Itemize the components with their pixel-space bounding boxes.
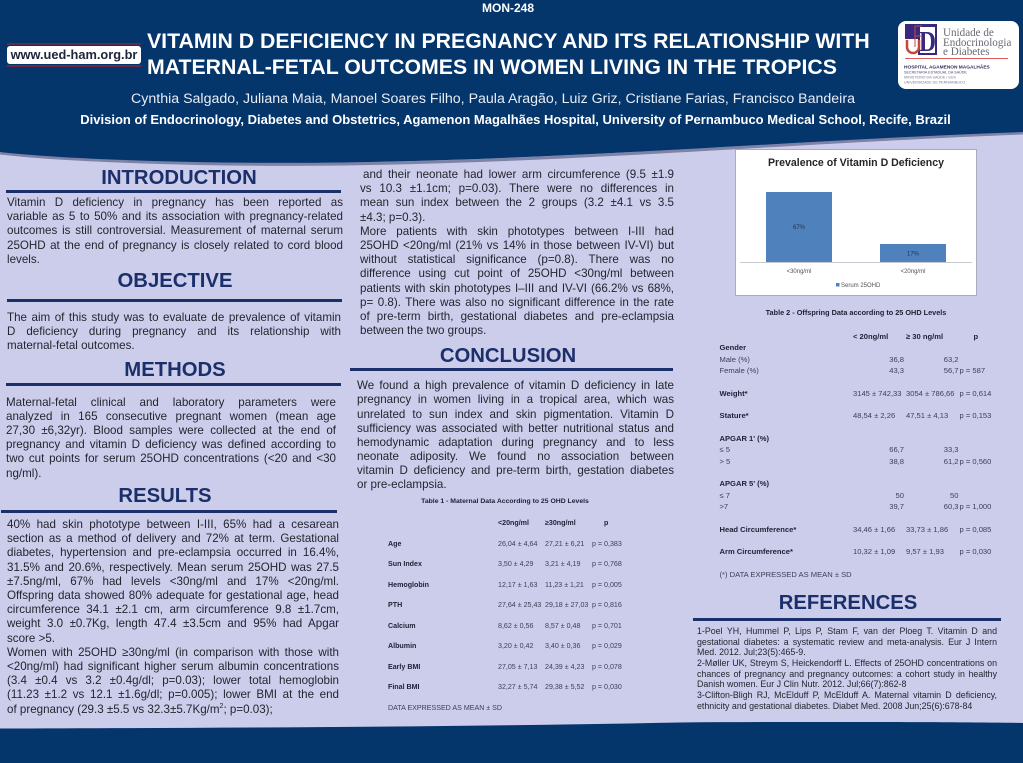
table 1 data: 8,57 ± 0,48: [545, 622, 580, 630]
table 2 data: Stature*: [720, 411, 749, 420]
text: references: 2-Møller UK, Streym S, Heickendorff L. Effects of 25OHD concentrations on: [697, 658, 997, 668]
table 1 data: 27,64 ± 25,43: [498, 601, 541, 609]
table 1 data: PTH: [388, 601, 402, 609]
bar chart: prevalence of vitamin D deficiency: [735, 149, 977, 296]
panel: results: [1, 485, 339, 716]
table 1 data: 32,27 ± 5,74: [498, 683, 537, 691]
table 2: offspring data: [720, 308, 992, 579]
text: introduction: variable as 5 to 50% and its association with pregnancy-related: [7, 210, 343, 223]
text: references: ethnicity and gestational diabetes. Diabet Med. 2008 Jun;25(6):678-84: [697, 701, 972, 711]
table 1 data: Hemoglobin: [388, 581, 429, 589]
table 2 data: > 5: [720, 457, 730, 466]
text: conclusion: neonate adiposity. We found no association between: [357, 450, 674, 463]
table 2 data: p: [974, 332, 978, 341]
text: introduction: Vitamin D deficiency in pregnancy has been reported as: [7, 196, 343, 209]
text: objective: maternal-fetal outcomes.: [7, 339, 135, 352]
table 2 data: >7: [720, 502, 728, 511]
text: results: Offspring data showed 80% adequate for gestational age, head: [7, 589, 339, 602]
header band: [0, 0, 1023, 166]
text: references: Danish women. Eur J Clin Nutr. 2012. Jul;66(7):862-8: [697, 679, 906, 689]
table 1 data: 3,40 ± 0,36: [545, 642, 580, 650]
table 2 data: [720, 332, 992, 579]
panel: introduction: [6, 167, 343, 266]
text: results: (11.23 ±1.2 vs 12.1 ±1.6g/dl; p=0.005); lower BMI at the end: [7, 688, 339, 701]
title: MATERNAL-FETAL OUTCOMES IN WOMEN LIVING IN THE TROPICS: [147, 55, 837, 79]
text: references: chances of pregnancy and pregnancy outcomes: a cohort study in healthy: [697, 669, 997, 679]
table 2 data: 33,3: [944, 445, 958, 454]
table 1 data: p: [604, 519, 608, 527]
text: results: score >5.: [7, 632, 55, 645]
table 2 data: 36,8: [889, 355, 904, 364]
table 2 data: ≤ 5: [720, 445, 730, 454]
table 1 data: [388, 519, 622, 712]
panel: references: [693, 592, 1001, 711]
text: results: Women with 25OHD ≥30ng/ml (in comparison with those with: [7, 646, 339, 659]
table 1 data: p = 0,701: [592, 622, 622, 630]
bar: under 20 ng/ml: 17%: [907, 252, 920, 258]
text: introduction: levels.: [7, 253, 40, 266]
text: results: <20ng/ml) had significant higher serum albumin concentrations: [7, 660, 339, 673]
poster number: MON-248: [482, 1, 534, 15]
authors: Cynthia Salgado, Juliana Maia, Manoel Soares Filho, Paula Aragão, Luiz Griz, Cristiane Farias, Francisco Bandeira: [131, 91, 855, 107]
table 1 data: 29,38 ± 5,52: [545, 683, 584, 691]
table 1 data: DATA EXPRESSED AS MEAN ± SD: [388, 704, 502, 712]
text: results continued: ±4.3; p=0.3).: [360, 211, 425, 224]
table 2 data: 50: [896, 491, 904, 500]
text: methods: ng/ml).: [6, 467, 41, 480]
text: methods: 27,30 ±6,32yr). Blood samples were collected at the end of: [6, 424, 336, 437]
footer band: [0, 722, 1023, 763]
table 2 data: p = 587: [960, 366, 985, 375]
heading: methods: METHODS: [124, 359, 226, 381]
text: results: circumference 34.1 ±2.1 cm, arm circumference 9.8 ±1.7cm,: [7, 603, 339, 616]
text: introduction: 25OHD at the end of pregnancy is closely related to cord blood: [7, 239, 343, 252]
table 1 data: 27,21 ± 6,21: [545, 540, 584, 548]
logo: HOSPITAL AGAMENON MAGALHÃES: [904, 64, 991, 70]
text: results continued: More patients with skin phototypes between I-III had: [360, 225, 674, 238]
logo: e Diabetes: [943, 46, 990, 58]
table 1 data: Calcium: [388, 622, 416, 630]
table 2 data: p = 0,614: [960, 389, 991, 398]
logo: UNIVERSIDADE DE PERNAMBUCO: [904, 80, 965, 84]
table 2 data: 63,2: [944, 355, 958, 364]
chart title: Prevalence of Vitamin D Deficiency: [768, 157, 944, 169]
bar: under 30 ng/ml: 67%: [793, 225, 806, 231]
table 2 data: Female (%): [720, 366, 759, 375]
table 2 data: Arm Circumference*: [720, 547, 793, 556]
table 2 data: (*) DATA EXPRESSED AS MEAN ± SD: [720, 570, 852, 579]
text: objective: [7, 311, 341, 352]
table 1 data: 27,05 ± 7,13: [498, 663, 537, 671]
text: conclusion: unrelated to sun index and skin pigmentation. Vitamin D: [357, 408, 674, 421]
table 1 data: p = 0,768: [592, 560, 622, 568]
text: objective: D deficiency during pregnancy and its relationship with: [7, 325, 341, 338]
text: methods: Maternal-fetal clinical and laboratory parameters were: [6, 396, 336, 409]
logo: SECRETARIA ESTADUAL DA SAÚDE: [904, 70, 967, 74]
text: results: weight 3.0 ±0.7Kg, length 47.4 ±3.5cm and 95% had Apgar: [7, 617, 339, 630]
table 1 data: 29,18 ± 27,03: [545, 601, 588, 609]
text: results: ±7.5ng/ml, 67% had levels <30ng/ml and 17% <20ng/ml.: [7, 575, 339, 588]
table 2 data: 50: [950, 491, 958, 500]
table 1 data: Final BMI: [388, 683, 420, 691]
heading: results: RESULTS: [118, 485, 212, 507]
table 2 data: 61,2: [944, 457, 958, 466]
text: methods: two cut points for serum 25OHD concentrations (<20 and <30: [6, 452, 336, 465]
table 2 data: Head Circumference*: [720, 525, 796, 534]
logo: MINISTÉRIO DA SAÚDE / SUS: [904, 74, 956, 80]
table 2 data: 38,8: [889, 457, 904, 466]
table 2 data: APGAR 5' (%): [720, 479, 769, 488]
text: objective: The aim of this study was to evaluate de prevalence of vitamin: [7, 311, 341, 324]
table 1 data: Sun Index: [388, 560, 422, 568]
text: conclusion: sufficiency was associated with better nutritional status and: [357, 422, 674, 435]
logo: Endocrinologia: [943, 37, 1011, 49]
table 1: maternal data: [388, 498, 622, 712]
table 2 data: 3145 ± 742,33: [853, 389, 902, 398]
table 2 data: ≤ 7: [720, 491, 730, 500]
table 2 data: p = 0,153: [960, 411, 991, 420]
table 1 data: 3,21 ± 4,19: [545, 560, 580, 568]
table 1 data: 11,23 ± 1,21: [545, 581, 584, 589]
table 2 data: 3054 ± 786,66: [906, 389, 955, 398]
heading: objective: OBJECTIVE: [118, 270, 232, 292]
table 2 data: 33,73 ± 1,86: [906, 525, 948, 534]
table 1 data: Albumin: [388, 642, 416, 650]
text: results continued: [360, 168, 674, 337]
text: results: 31.5% and 20.6%, respectively. Mean serum 25OHD was 27.5: [7, 560, 339, 574]
table 1 data: 24,39 ± 4,23: [545, 663, 584, 671]
axis labels: <30ng/ml: [787, 269, 811, 275]
table 2 data: 10,32 ± 1,09: [853, 547, 895, 556]
table 2 data: p = 0,560: [960, 457, 991, 466]
text: conclusion: or pre-eclampsia.: [357, 478, 447, 491]
panel: objective: [7, 270, 342, 352]
text: methods: pregnancy and vitamin D deficiency was defined according to: [6, 438, 336, 451]
title: [147, 29, 870, 79]
table 2 data: 56,7: [944, 366, 958, 375]
text: introduction: [7, 196, 343, 266]
text: results: of pregnancy (29.3 ±5.5 vs 32.3±5.7Kg/m2; p=0.03);: [7, 703, 273, 716]
bar: under 30 ng/ml: [766, 192, 832, 262]
axis labels: <20ng/ml: [901, 269, 925, 275]
table 2 data: ≥ 30 ng/ml: [906, 332, 943, 341]
table 1 data: p = 0,078: [592, 663, 622, 671]
table 2 data: 34,46 ± 1,66: [853, 525, 895, 534]
table 2 data: p = 0,085: [960, 525, 991, 534]
table 1 data: p = 0,029: [592, 642, 622, 650]
text: results: section as a method of delivery and 72% at term. Gestational: [7, 532, 339, 545]
text: references: Med. 2012. Jul;23(5):465-9.: [697, 647, 806, 657]
table 1 data: 3,20 ± 0,42: [498, 642, 533, 650]
text: results continued: 25OHD <20ng/ml (21% vs 14% in those between IV-VI) but: [360, 239, 674, 252]
text: references: 1-Poel YH, Hummel P, Lips P, Stam F, van der Ploeg T. Vitamin D and: [697, 626, 997, 636]
heading: introduction: INTRODUCTION: [101, 167, 257, 189]
axis labels: [787, 269, 925, 275]
table 2 data: Weight*: [720, 389, 748, 398]
table 1 data: p = 0,816: [592, 601, 622, 609]
website badge: www.ued-ham.org.br: [11, 47, 137, 62]
text: results continued: mean sun index between the 2 groups (3.2 ±4.1 vs 3.5: [360, 196, 674, 209]
text: results continued: of pre-term birth, gestational diabetes and pre-eclampsia: [360, 310, 674, 323]
table 1 data: 26,04 ± 4,64: [498, 540, 537, 548]
text: results continued: p= 0.8). There was also no significant difference in the rate: [360, 296, 674, 309]
logo: Unidade de: [943, 27, 994, 39]
text: methods: analyzed in 165 consecutive pregnant women (mean age: [6, 410, 336, 423]
table 2 data: p = 1,000: [960, 502, 991, 511]
table 1 data: Early BMI: [388, 663, 420, 671]
table 1 data: p = 0,383: [592, 540, 622, 548]
table 1 data: 3,50 ± 4,29: [498, 560, 533, 568]
table 1 data: 12,17 ± 1,63: [498, 581, 537, 589]
panel: conclusion: [350, 345, 674, 491]
logo: [898, 21, 1019, 89]
text: results: [7, 518, 339, 716]
affiliation: Division of Endocrinology, Diabetes and Obstetrics, Agamenon Magalhães Hospital, University of Pernambuco Medical School, Recife, Brazil: [80, 112, 951, 127]
text: references: [697, 626, 997, 711]
text: results: 40% had skin phototype between I-III, 65% had a cesarean: [7, 518, 339, 531]
table 2 data: 43,3: [889, 366, 904, 375]
logo: D: [919, 27, 936, 58]
table 1 data: Age: [388, 540, 401, 548]
text: introduction: outcomes is still controversial. Measurement of maternal serum: [7, 224, 343, 237]
bar: under 20 ng/ml: [880, 244, 946, 262]
heading: references: REFERENCES: [779, 592, 917, 614]
table 2 data: 39,7: [889, 502, 904, 511]
text: conclusion: pregnancy in women living in a tropical area, which was: [357, 393, 674, 406]
text: results: (3.4 ±0.4 vs 3.2 ±0.4g/dl; p=0.03); lower total hemoglobin: [7, 674, 339, 687]
table 1 data: <20ng/ml: [498, 519, 529, 527]
text: results continued: vs 10.3 ±1.1cm; p=0.03). There were no differences in: [360, 182, 674, 195]
text: results: diabetes, hypertension and pre-eclampsia occurred in 16.4%,: [7, 546, 339, 559]
table 2 data: 66,7: [889, 445, 904, 454]
table 1 title: Table 1 - Maternal Data According to 25 OHD Levels: [421, 498, 589, 505]
table 2 data: Male (%): [720, 355, 750, 364]
table 2 data: 47,51 ± 4,13: [906, 411, 948, 420]
table 2 data: Gender: [720, 343, 746, 352]
text: results continued: without statistical significance (p=0.8). There was no: [360, 253, 674, 266]
text: conclusion: [357, 379, 674, 491]
legend: Serum 25OHD: [841, 283, 881, 289]
table 2 data: < 20ng/ml: [853, 332, 888, 341]
text: references: 3-Clifton-Bligh RJ, McElduff P, McElduff A. Maternal vitamin D deficiency,: [697, 690, 997, 700]
table 2 data: APGAR 1' (%): [720, 434, 769, 443]
text: results continued: between the two groups.: [360, 324, 486, 337]
text: conclusion: vitamin D deficiency and pre-term birth, gestation diabetes: [357, 464, 674, 477]
table 2 data: 60,3: [944, 502, 958, 511]
text: results continued: patients with skin phototypes I–III and IV-VI (66.2% vs 68%,: [360, 282, 674, 295]
panel: methods: [6, 359, 341, 480]
text: results continued: difference using cut point of 25OHD <30ng/ml between: [360, 267, 674, 280]
table 2 data: 9,57 ± 1,93: [906, 547, 944, 556]
text: results continued: and their neonate had lower arm circumference (9.5 ±1.9: [363, 168, 674, 181]
table 1 data: p = 0,030: [592, 683, 622, 691]
table 1 data: 8,62 ± 0,56: [498, 622, 533, 630]
table 2 data: 48,54 ± 2,26: [853, 411, 895, 420]
text: conclusion: hemodynamic adaptation during pregnancy and to less: [357, 436, 674, 449]
heading: conclusion: CONCLUSION: [440, 345, 576, 367]
text: methods: [6, 396, 336, 480]
text: conclusion: We found a high prevalence of vitamin D deficiency in late: [357, 379, 674, 392]
text: references: gestational diabetes: a systematic review and meta-analysis. Eur J Intern: [697, 637, 997, 647]
table 1 data: ≥30ng/ml: [545, 519, 576, 527]
table 2 data: p = 0,030: [960, 547, 991, 556]
table 1 data: p = 0,005: [592, 581, 622, 589]
title: VITAMIN D DEFICIENCY IN PREGNANCY AND ITS RELATIONSHIP WITH: [147, 29, 870, 53]
table 2 title: Table 2 - Offspring Data according to 25 OHD Levels: [766, 308, 946, 317]
